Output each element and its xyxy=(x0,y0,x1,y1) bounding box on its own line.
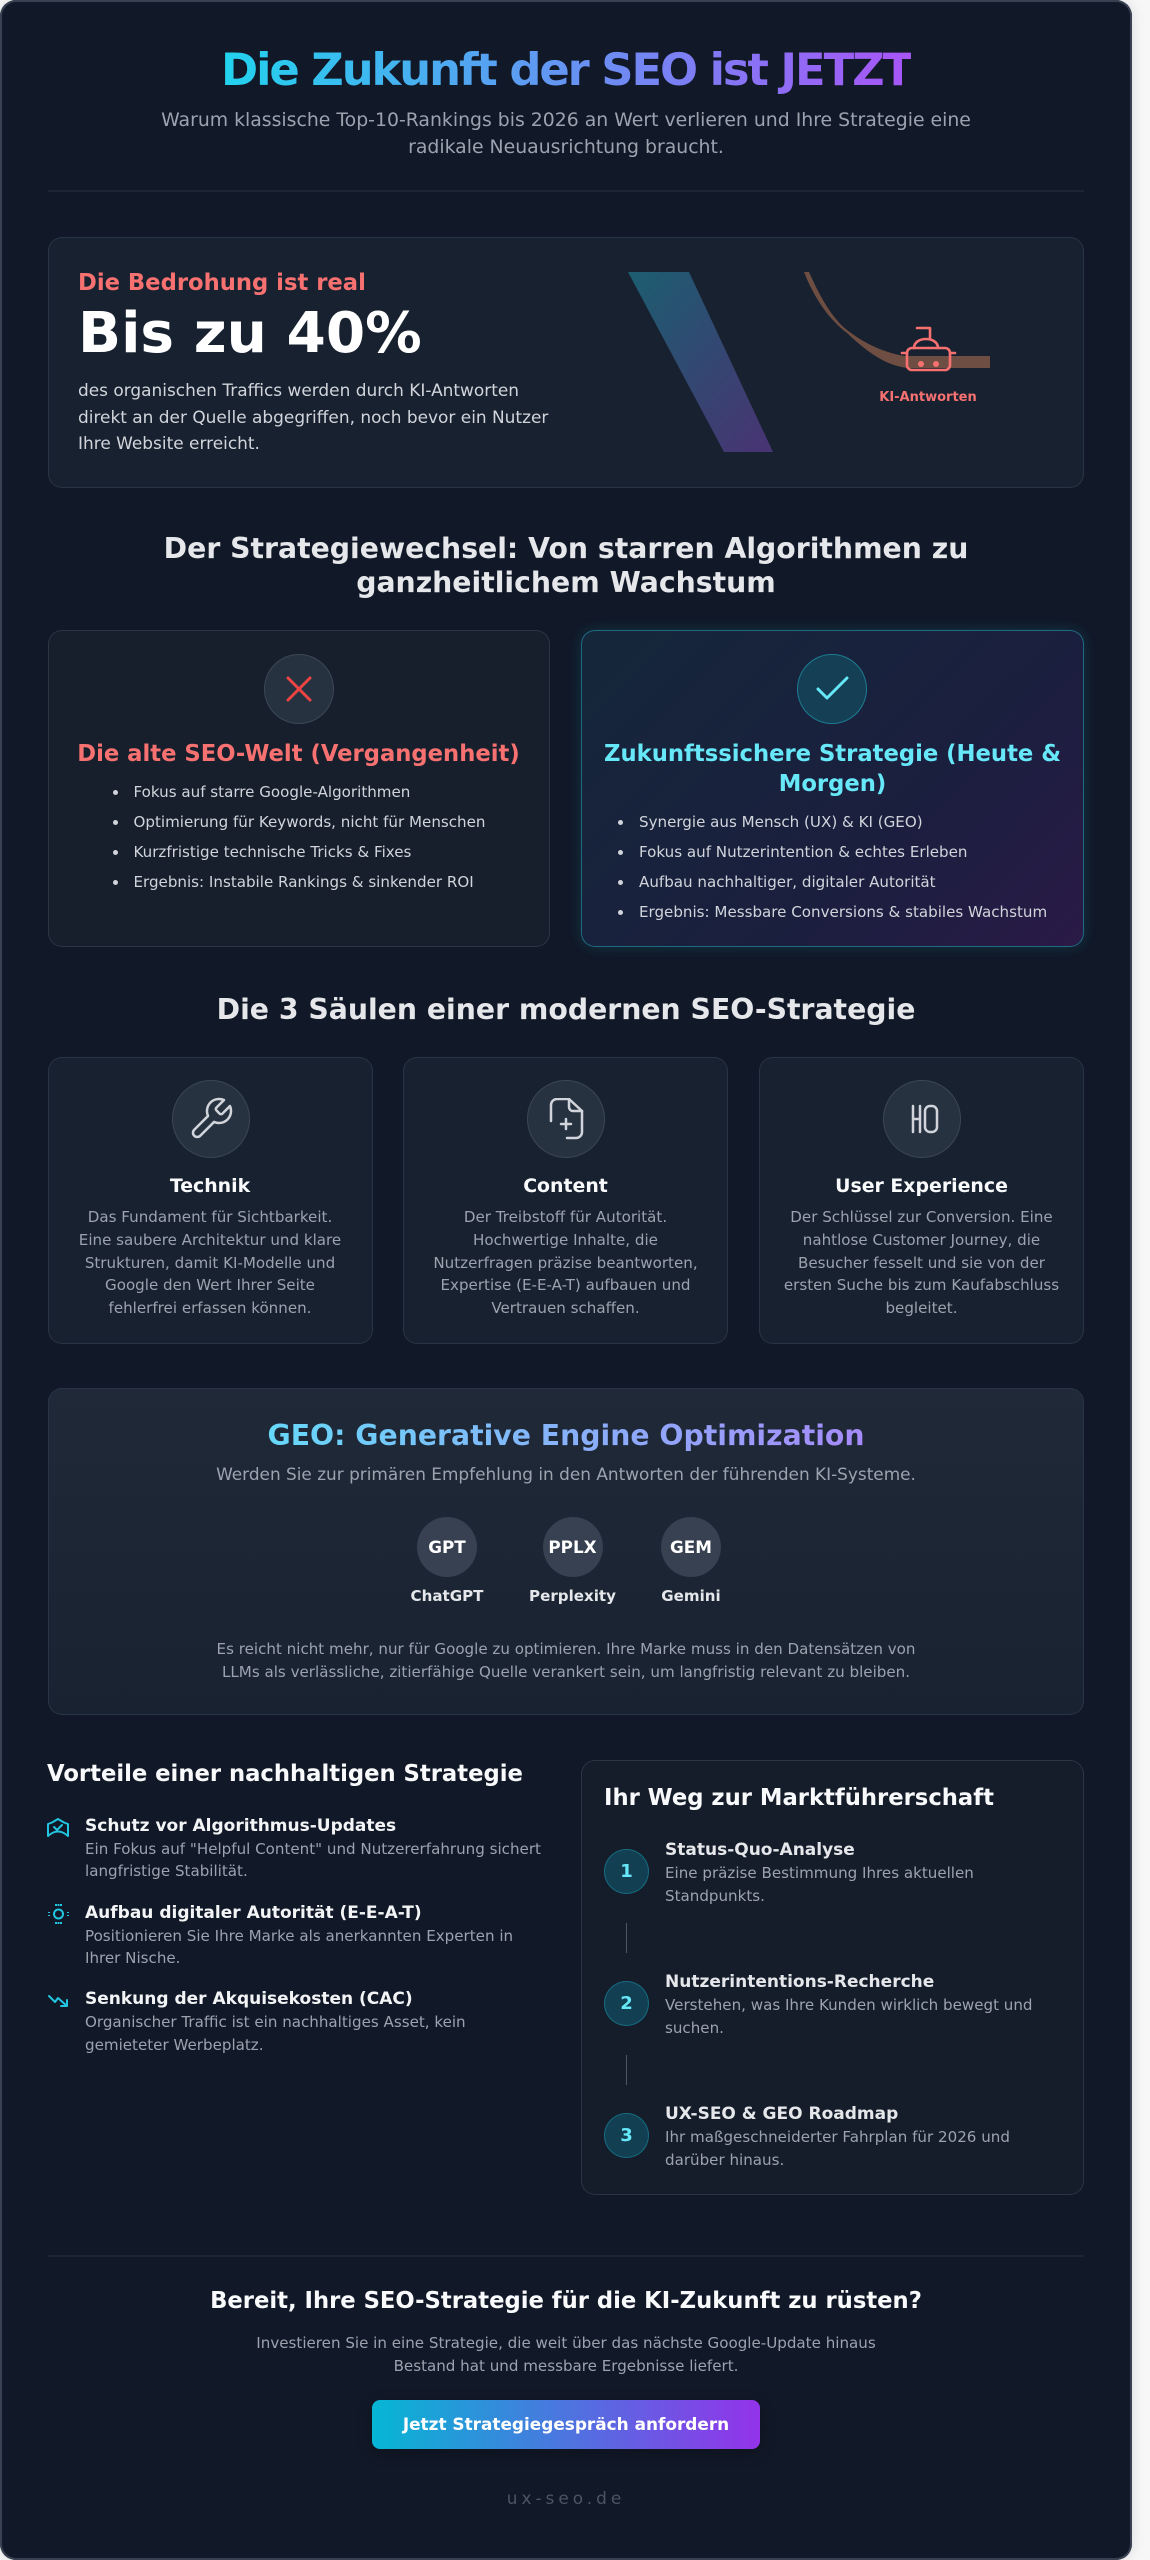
benefit 3 xyxy=(85,1989,466,2054)
GEO heading: GEO: Generative Engine Optimization xyxy=(267,1419,865,1452)
benefits column xyxy=(47,1761,541,2054)
pillar text: begleitet. xyxy=(885,1299,958,1317)
pillar text: Das Fundament für Sichtbarkeit. xyxy=(88,1208,332,1226)
threat description: des organischen Traffics werden durch KI-Antworten xyxy=(78,380,519,400)
panel: pillar Content xyxy=(403,1057,728,1344)
icon: trending down xyxy=(48,1995,68,2007)
pillar text: Eine saubere Architektur und klare xyxy=(79,1231,341,1249)
benefit 3: gemieteter Werbeplatz. xyxy=(85,2036,264,2054)
list: future: Ergebnis: Messbare Conversions & stabiles Wachstum xyxy=(639,903,1047,921)
step 1 number: 1 xyxy=(620,1861,633,1882)
step 1 text: Eine präzise Bestimmung Ihres aktuellen xyxy=(665,1864,974,1882)
subtitle: radikale Neuausrichtung braucht. xyxy=(408,137,724,158)
panel: pillar Technik xyxy=(48,1057,372,1344)
step 1 number xyxy=(604,1849,649,1894)
subtitle xyxy=(161,110,971,158)
title: Die Zukunft der SEO ist JETZT xyxy=(221,43,911,96)
list: future xyxy=(618,813,1047,921)
pillar title: User Experience xyxy=(835,1175,1008,1197)
heading: three pillars: Die 3 Säulen einer modernen SEO-Strategie xyxy=(217,993,915,1026)
panel: pillar User Experience xyxy=(759,1057,1084,1344)
icon: file plus xyxy=(527,1080,605,1158)
heading: strategy shift: Der Strategiewechsel: Von starren Algorithmen zu xyxy=(164,532,968,565)
list: future: Synergie aus Mensch (UX) & KI (GEO) xyxy=(639,813,923,831)
icon: authority chip xyxy=(48,1904,69,1924)
panel: threat xyxy=(48,237,1084,488)
pillar text: Nutzerfragen präzise beantworten, xyxy=(433,1254,698,1272)
list: future: Fokus auf Nutzerintention & echtes Erleben xyxy=(639,843,967,861)
pillar text: Google den Wert Ihrer Seite xyxy=(105,1276,315,1294)
benefit 2: Aufbau digitaler Autorität (E-E-A-T) xyxy=(85,1902,422,1922)
step 1 text: Standpunkts. xyxy=(665,1887,765,1905)
benefit 3: Senkung der Akquisekosten (CAC) xyxy=(85,1989,413,2009)
pillar text: Besucher fesselt und sie von der xyxy=(798,1254,1045,1272)
label ChatGPT: ChatGPT xyxy=(411,1587,483,1605)
icon: check xyxy=(797,654,867,724)
GEO description: Es reicht nicht mehr, nur für Google zu optimieren. Ihre Marke muss in den Datensätzen von xyxy=(217,1640,915,1658)
list: future: Aufbau nachhaltiger, digitaler Autorität xyxy=(639,873,936,891)
icon: layout bars xyxy=(883,1080,961,1158)
heading: strategy shift: ganzheitlichem Wachstum xyxy=(356,566,776,599)
label Gemini: Gemini xyxy=(661,1587,721,1605)
benefit 1: langfristige Stabilität. xyxy=(85,1862,248,1880)
heading: future: Morgen) xyxy=(779,771,886,797)
pillar text: Der Treibstoff für Autorität. xyxy=(464,1208,667,1226)
list: old world: Kurzfristige technische Tricks & Fixes xyxy=(134,843,411,861)
pillar title: Content xyxy=(523,1175,608,1197)
list: old world: Optimierung für Keywords, nicht für Menschen xyxy=(134,813,485,831)
pillar text xyxy=(784,1208,1059,1317)
CTA heading: Bereit, Ihre SEO-Strategie für die KI-Zukunft zu rüsten? xyxy=(210,2288,922,2314)
panel: GEO xyxy=(48,1388,1084,1715)
CTA text: Investieren Sie in eine Strategie, die weit über das nächste Google-Update hinaus xyxy=(256,2334,876,2352)
icon: wrench xyxy=(172,1080,250,1158)
GEO description: LLMs als verlässliche, zitierfähige Quelle verankert sein, um langfristig relevant zu bleiben. xyxy=(222,1663,910,1681)
CTA text xyxy=(256,2334,876,2375)
AI badge Gemini: GEM xyxy=(670,1537,712,1557)
step 2 text: suchen. xyxy=(665,2019,724,2037)
footer brand: ux-seo.de xyxy=(507,2488,625,2508)
step 3 text: UX-SEO & GEO Roadmap xyxy=(665,2104,898,2124)
roadmap heading: Ihr Weg zur Marktführerschaft xyxy=(604,1785,994,1811)
step 3 text: darüber hinaus. xyxy=(665,2151,784,2169)
step 3 text: Ihr maßgeschneiderter Fahrplan für 2026 und xyxy=(665,2128,1010,2146)
step 1 text: Status-Quo-Analyse xyxy=(665,1840,855,1860)
threat description: Ihre Website erreicht. xyxy=(78,433,260,453)
pillar text: Der Schlüssel zur Conversion. Eine xyxy=(790,1208,1053,1226)
panel: future strategy xyxy=(581,630,1084,947)
benefit 3: Organischer Traffic ist ein nachhaltiges Asset, kein xyxy=(85,2013,466,2031)
GEO subtitle: Werden Sie zur primären Empfehlung in den Antworten der führenden KI-Systeme. xyxy=(216,1464,916,1484)
step 3 number: 3 xyxy=(620,2125,633,2146)
step 2 text: Nutzerintentions-Recherche xyxy=(665,1972,934,1992)
heading: future xyxy=(604,741,1061,797)
subtitle: Warum klassische Top-10-Rankings bis 2026 an Wert verlieren und Ihre Strategie eine xyxy=(161,110,971,131)
heading: strategy shift xyxy=(164,532,968,599)
AI badge ChatGPT: GPT xyxy=(428,1537,466,1557)
pillar text: nahtlose Customer Journey, die xyxy=(803,1231,1040,1249)
panel: roadmap xyxy=(581,1760,1084,2195)
heading: future: Zukunftssichere Strategie (Heute & xyxy=(604,741,1061,767)
pillar text: ersten Suche bis zum Kaufabschluss xyxy=(784,1276,1059,1294)
icon: cross xyxy=(264,654,334,724)
benefit 2 xyxy=(85,1902,513,1967)
list: old world xyxy=(113,783,485,891)
pillar text: Expertise (E-E-A-T) aufbauen und xyxy=(440,1276,690,1294)
step 2 number: 2 xyxy=(620,1993,633,2014)
benefit 2: Positionieren Sie Ihre Marke als anerkannten Experten in xyxy=(85,1926,513,1944)
benefit 1: Schutz vor Algorithmus-Updates xyxy=(85,1816,396,1836)
heading: old world: Die alte SEO-Welt (Vergangenheit) xyxy=(77,741,520,767)
threat figure: Bis zu 40% xyxy=(78,301,422,366)
pillar title: Technik xyxy=(170,1175,250,1197)
pillar text: fehlerfrei erfassen können. xyxy=(108,1299,311,1317)
CTA text: Bestand hat und messbare Ergebnisse liefert. xyxy=(394,2357,738,2375)
panel: old SEO world xyxy=(48,630,550,947)
step 2 number xyxy=(604,1981,649,2026)
benefit 1 xyxy=(85,1816,541,1880)
pillar text xyxy=(433,1208,698,1317)
AI badge Perplexity: PPLX xyxy=(548,1537,597,1557)
step 2 text xyxy=(665,1972,1033,2037)
pillar text: Vertrauen schaffen. xyxy=(491,1299,640,1317)
threat label: Die Bedrohung ist real xyxy=(78,270,366,296)
icon: shield check xyxy=(47,1818,69,1837)
step 1 text xyxy=(665,1840,974,1905)
benefit 2: Ihrer Nische. xyxy=(85,1949,180,1967)
list: old world: Fokus auf starre Google-Algorithmen xyxy=(134,783,410,801)
benefit 1: Ein Fokus auf "Helpful Content" und Nutzererfahrung sichert xyxy=(85,1840,541,1858)
GEO description xyxy=(217,1640,915,1681)
CTA button: Jetzt Strategiegespräch anfordern xyxy=(403,2414,729,2434)
chart: traffic flow: KI-Antworten xyxy=(879,390,977,405)
pillar text xyxy=(79,1208,341,1317)
AI badge Perplexity xyxy=(542,1517,602,1577)
list: old world: Ergebnis: Instabile Rankings & sinkender ROI xyxy=(134,873,474,891)
CTA button xyxy=(372,2400,760,2449)
benefits heading: Vorteile einer nachhaltigen Strategie xyxy=(47,1761,523,1787)
pillar text: Hochwertige Inhalte, die xyxy=(473,1231,658,1249)
threat description: direkt an der Quelle abgegriffen, noch bevor ein Nutzer xyxy=(78,407,548,427)
step 3 text xyxy=(665,2104,1010,2169)
step 2 text: Verstehen, was Ihre Kunden wirklich bewegt und xyxy=(665,1996,1033,2014)
AI badge ChatGPT xyxy=(417,1517,477,1577)
AI badge Gemini xyxy=(661,1517,721,1577)
pillar text: Strukturen, damit KI-Modelle und xyxy=(85,1254,335,1272)
label Perplexity: Perplexity xyxy=(529,1587,616,1605)
threat description xyxy=(78,380,548,453)
step 3 number xyxy=(604,2113,649,2158)
chart: traffic flow xyxy=(628,272,990,452)
